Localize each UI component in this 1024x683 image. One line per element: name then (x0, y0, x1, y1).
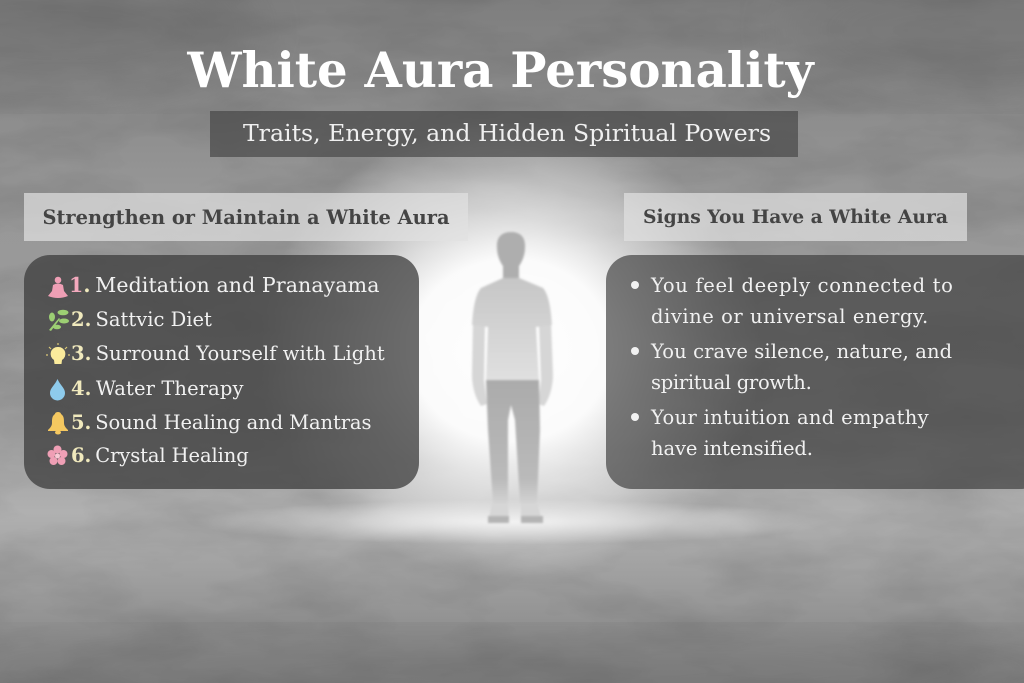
heading: strengthen or maintain: Strengthen or Maintain a White Aura (42, 206, 450, 229)
bullet 1 (631, 281, 639, 289)
list item 5: 5. Sound Healing and Mantras (71, 411, 371, 434)
sign 2: spiritual growth. (651, 371, 811, 394)
sign 1 (650, 274, 954, 328)
shoes (488, 503, 543, 523)
sign 2 (650, 340, 952, 394)
sign 3 (650, 406, 929, 460)
list item 1: 1. Meditation and Pranayama (69, 273, 380, 297)
icon: leaves (49, 310, 69, 331)
subtitle banner: Traits, Energy, and Hidden Spiritual Powers (243, 119, 771, 147)
sign 3: have intensified. (651, 437, 813, 460)
sign 3: Your intuition and empathy (651, 406, 929, 429)
icon: light bulb (46, 343, 70, 364)
icon: flower (48, 446, 68, 465)
sign 1: divine or universal energy. (651, 305, 929, 328)
list item 3: 3. Surround Yourself with Light (71, 342, 385, 365)
panel: practices list (24, 255, 419, 489)
icon: meditation (48, 276, 68, 298)
heading: signs (624, 193, 967, 241)
title: White Aura Personality (187, 43, 814, 99)
heading: strengthen or maintain (24, 193, 468, 241)
list item 6: 6. Crystal Healing (71, 444, 249, 467)
sign 1: You feel deeply connected to (651, 274, 954, 297)
head (497, 232, 525, 278)
arms (472, 322, 553, 406)
subtitle banner (210, 111, 798, 157)
bullet 3 (631, 413, 639, 421)
t-shirt (472, 278, 552, 380)
heading: signs: Signs You Have a White Aura (643, 206, 948, 228)
figure (472, 232, 553, 523)
bullet 2 (631, 347, 639, 355)
panel: signs list (606, 255, 1024, 489)
sign 2: You crave silence, nature, and (651, 340, 952, 363)
icon: bell (48, 412, 68, 434)
list item 2: 2. Sattvic Diet (71, 308, 212, 331)
legs (486, 380, 540, 503)
icon: water drop (50, 379, 65, 400)
list item 4: 4. Water Therapy (71, 377, 244, 400)
